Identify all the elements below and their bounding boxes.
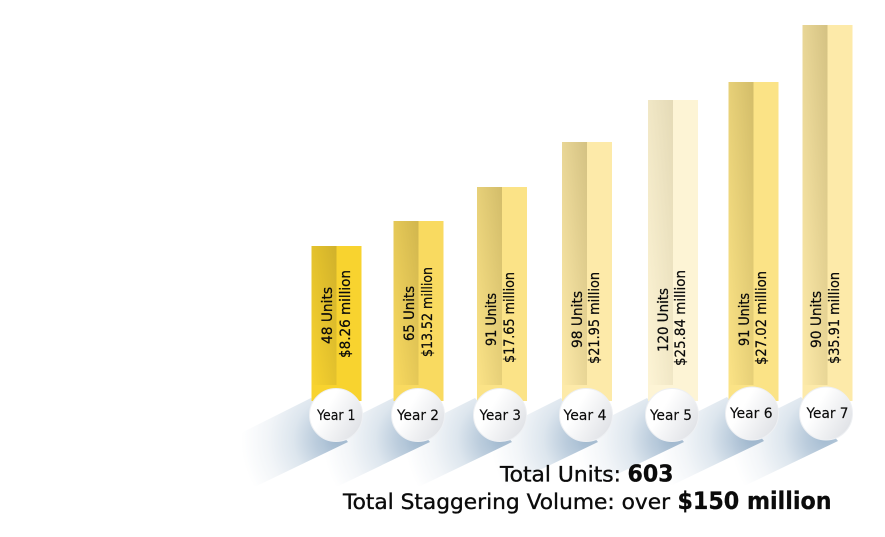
badge: Year 6: Year 6 xyxy=(729,406,773,422)
badge: Year 5: Year 5 xyxy=(649,408,692,424)
total volume text xyxy=(342,487,832,515)
column: Year 5: $25.84 million xyxy=(673,270,689,366)
column: Year 6 xyxy=(728,82,778,401)
badge: Year 3: Year 3 xyxy=(479,408,521,424)
badge: Year 2: Year 2 xyxy=(396,408,439,424)
badge: Year 6 xyxy=(726,387,778,440)
column: Year 4 xyxy=(562,142,612,401)
badge: Year 7: Year 7 xyxy=(806,406,848,422)
column: Year 4: 98 Units xyxy=(570,291,586,348)
diagonal shadows xyxy=(241,397,838,492)
column: Year 7 xyxy=(802,25,852,401)
column: Year 2: 65 Units xyxy=(402,286,418,341)
badge: Year 7 xyxy=(800,387,852,440)
column: Year 3: 91 Units xyxy=(484,293,500,346)
total units text: Total Units: xyxy=(499,462,621,486)
badge: Year 2 xyxy=(392,388,444,442)
column: Year 5 xyxy=(648,100,698,401)
total units text: 603 xyxy=(628,462,674,488)
badge: Year 5 xyxy=(646,388,698,442)
column: Year 1: 48 Units xyxy=(320,287,336,344)
badge: Year 1 xyxy=(310,388,362,442)
column: Year 1 xyxy=(312,246,362,401)
column: Year 6: 91 Units xyxy=(737,293,753,346)
badge: Year 1: Year 1 xyxy=(316,408,356,424)
column: Year 3 xyxy=(477,187,527,401)
total units text xyxy=(499,462,674,488)
column: Year 5: 120 Units xyxy=(656,288,672,352)
column: Year 2 xyxy=(394,221,444,401)
column: Year 4: $21.95 million xyxy=(587,272,603,364)
column: Year 7: $35.91 million xyxy=(827,272,843,364)
total volume text: $150 million xyxy=(678,487,832,515)
column: Year 7: 90 Units xyxy=(809,291,825,348)
badge: Year 4 xyxy=(560,388,612,442)
column: Year 6: $27.02 million xyxy=(754,271,770,365)
column: Year 1: $8.26 million xyxy=(338,270,354,358)
badge: Year 3 xyxy=(474,388,526,442)
column: Year 3: $17.65 million xyxy=(502,272,518,363)
badge: Year 4: Year 4 xyxy=(562,408,607,424)
total volume text: Total Staggering Volume: over xyxy=(342,490,670,514)
column: Year 2: $13.52 million xyxy=(420,267,436,357)
